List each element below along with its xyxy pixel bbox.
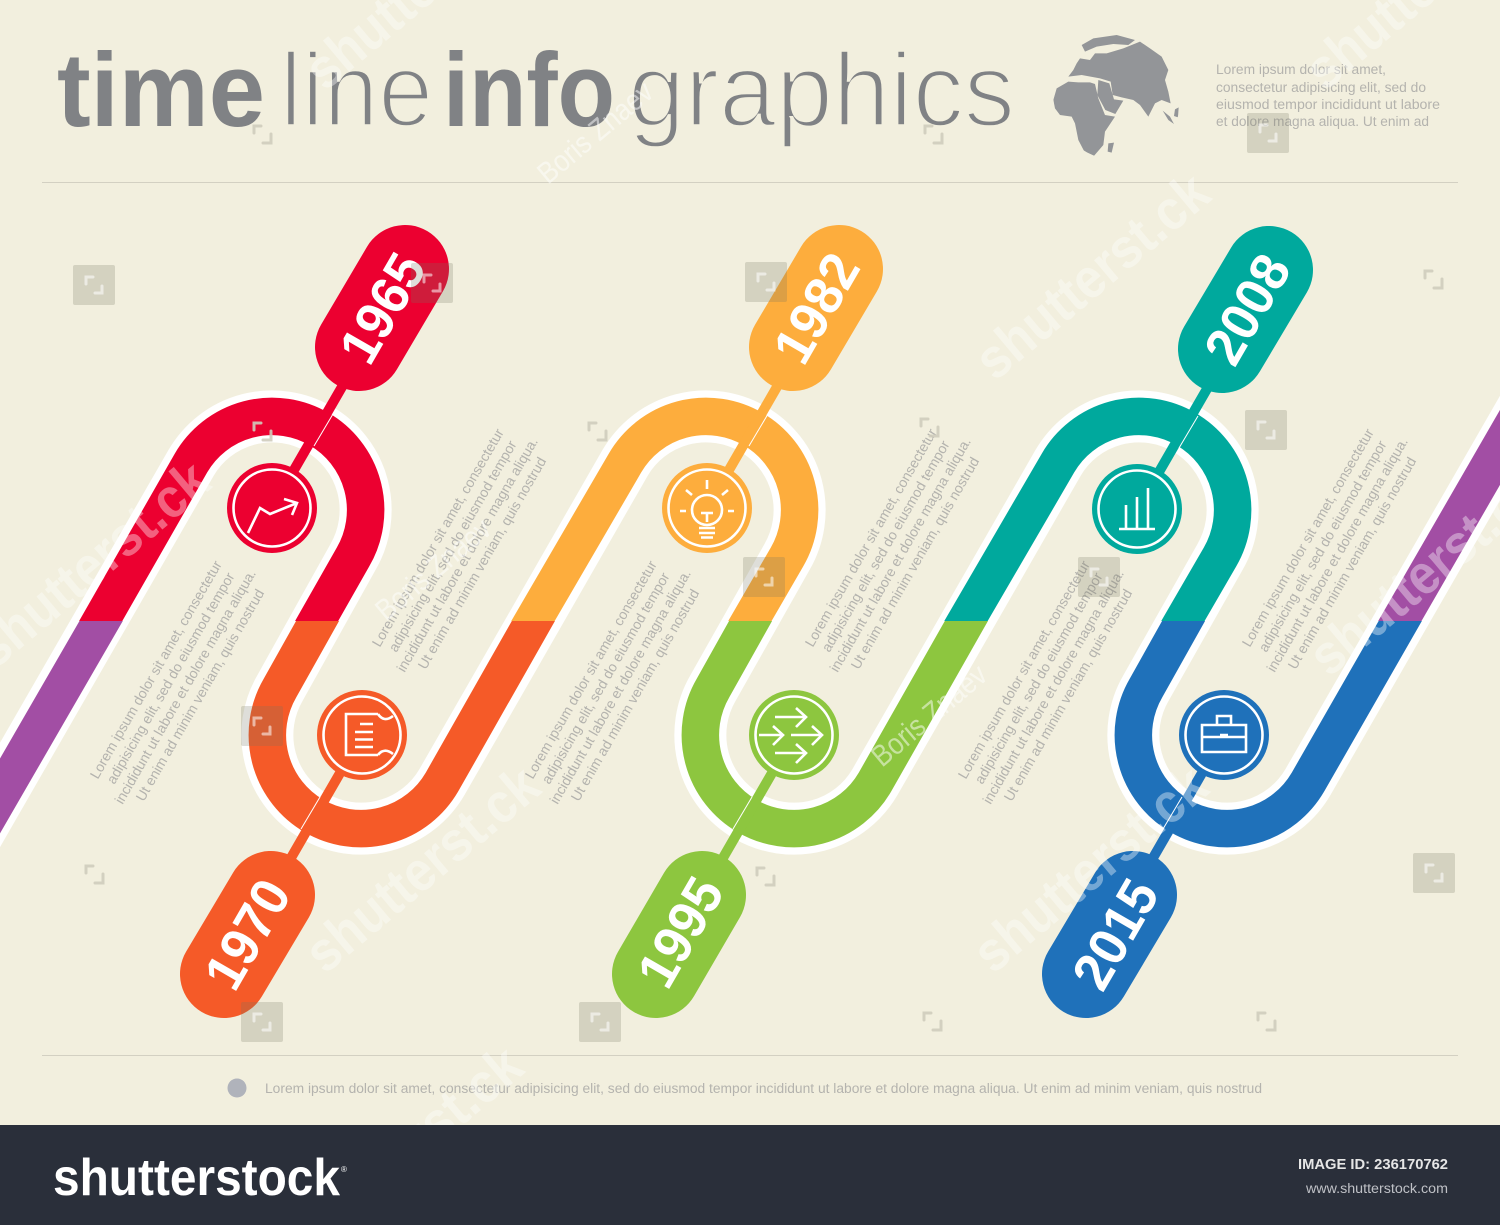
- watermark small brackets: [86, 126, 1442, 1030]
- text block 2: Ut enim ad minim veniam, quis nostrud: [414, 454, 549, 672]
- title: line: [280, 32, 433, 149]
- header text block: et dolore magna aliqua. Ut enim ad: [1216, 114, 1429, 129]
- text block 5: [950, 550, 1142, 815]
- text block 3: Ut enim ad minim veniam, quis nostrud: [567, 586, 702, 804]
- text block 3: [517, 550, 709, 815]
- text block 4: Ut enim ad minim veniam, quis nostrud: [847, 454, 982, 672]
- text block 6: Lorem ipsum dolor sit amet, consectetur: [1238, 425, 1377, 649]
- text block 1: [82, 550, 274, 815]
- watermark squares: [73, 113, 1455, 1042]
- bottom bar: www.shutterstock.com: [1305, 1181, 1448, 1196]
- text block 6: Ut enim ad minim veniam, quis nostrud: [1284, 454, 1419, 672]
- header text block: eiusmod tempor incididunt ut labore: [1216, 97, 1440, 112]
- text block 6: [1234, 418, 1426, 683]
- bottom bar: [0, 1125, 1500, 1225]
- text block 5: Lorem ipsum dolor sit amet, consectetur: [954, 557, 1093, 781]
- text block 4: incididunt ut labore et dolore magna aliqua.: [826, 435, 974, 674]
- text block 1: incididunt ut labore et dolore magna aliqua.: [111, 567, 259, 806]
- text block 5: Ut enim ad minim veniam, quis nostrud: [1000, 586, 1135, 804]
- text block 2: adipisicing elit, sed do eiusmod tempor: [385, 437, 520, 654]
- bottom bar: ®: [341, 1165, 347, 1174]
- text block 2: incididunt ut labore et dolore magna aliqua.: [393, 435, 541, 674]
- watermark shutterstock text: shutterst.ck: [960, 752, 1220, 984]
- text block 1: Ut enim ad minim veniam, quis nostrud: [132, 586, 267, 804]
- milestone 2015: [1061, 690, 1269, 1000]
- text block 5: incididunt ut labore et dolore magna aliqua.: [979, 567, 1127, 806]
- milestone 1982: [662, 243, 872, 553]
- text block 4: [797, 418, 989, 683]
- milestone 1970: 1970: [193, 869, 303, 1000]
- text block 4: Lorem ipsum dolor sit amet, consectetur: [801, 425, 940, 649]
- header text block: Lorem ipsum dolor sit amet,: [1216, 62, 1386, 77]
- header text block: consectetur adipisicing elit, sed do: [1216, 80, 1426, 95]
- text block 5: adipisicing elit, sed do eiusmod tempor: [971, 569, 1106, 786]
- bottom bar: IMAGE ID: 236170762: [1298, 1157, 1448, 1173]
- watermark shutterstock text: Boris Znaev: [865, 658, 994, 773]
- text block 3: Lorem ipsum dolor sit amet, consectetur: [521, 557, 660, 781]
- text block 1: adipisicing elit, sed do eiusmod tempor: [103, 569, 238, 786]
- title: time: [57, 32, 265, 149]
- text block 4: adipisicing elit, sed do eiusmod tempor: [818, 437, 953, 654]
- header text block: [1216, 62, 1440, 129]
- title: [57, 32, 1015, 149]
- milestone 1982: 1982: [762, 243, 872, 374]
- title: info: [443, 32, 615, 149]
- icon: globe: [1053, 35, 1180, 157]
- watermark shutterstock text: shutterst.ck: [292, 752, 552, 984]
- title: graphics: [628, 32, 1015, 149]
- milestone 1995: 1995: [626, 867, 736, 998]
- timeline track: [0, 390, 1500, 854]
- watermark shutterstock text: Boris Znaev: [369, 512, 498, 627]
- watermark shutterstock text: Boris Znaev: [531, 75, 660, 190]
- text block 3: incididunt ut labore et dolore magna aliqua.: [546, 567, 694, 806]
- text block 2: [364, 418, 556, 683]
- text block 1: Lorem ipsum dolor sit amet, consectetur: [86, 557, 225, 781]
- milestone 2008: [1092, 244, 1303, 554]
- watermark shutterstock text: shutterst.ck: [962, 159, 1222, 391]
- milestone 2008: 2008: [1193, 244, 1303, 375]
- milestone 1970: [193, 690, 407, 1000]
- text block 3: adipisicing elit, sed do eiusmod tempor: [538, 569, 673, 786]
- text block 6: adipisicing elit, sed do eiusmod tempor: [1255, 437, 1390, 654]
- milestone 1995: [626, 690, 839, 998]
- bottom bar: shutterstock: [53, 1149, 340, 1207]
- milestone 1965: [227, 243, 438, 553]
- text block 2: Lorem ipsum dolor sit amet, consectetur: [368, 425, 507, 649]
- milestone 1965: 1965: [328, 243, 438, 374]
- milestone 2015: 2015: [1061, 869, 1171, 1000]
- footer note: Lorem ipsum dolor sit amet, consectetur adipisicing elit, sed do eiusmod tempor incididunt ut labore et dolore magna aliqua. Ut enim ad minim veniam, quis nostrud: [265, 1081, 1262, 1096]
- text block 6: incididunt ut labore et dolore magna aliqua.: [1263, 435, 1411, 674]
